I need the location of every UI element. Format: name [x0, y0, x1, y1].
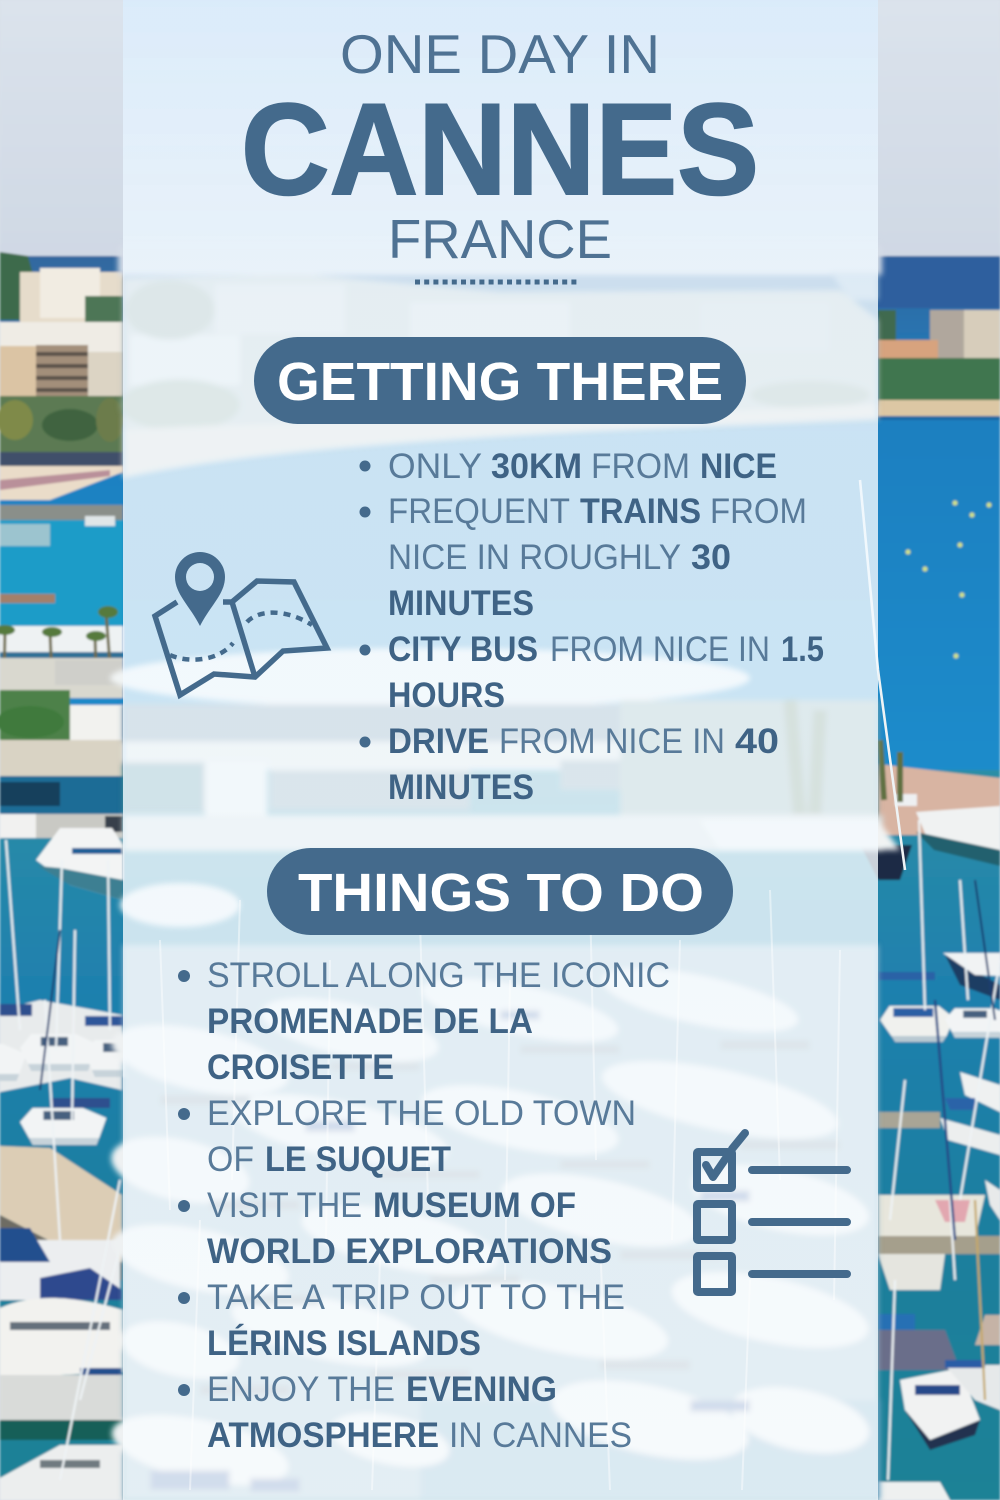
bullet: city bus: CITY BUS — [388, 630, 538, 669]
bullet: museum: WORLD EXPLORATIONS — [207, 1232, 612, 1271]
left yacht — [36, 828, 123, 900]
bullet: frequent trains: 30 — [691, 538, 731, 577]
bullet: evening: EVENING — [406, 1370, 557, 1409]
bullet: islands: TAKE A TRIP OUT TO THE — [207, 1278, 625, 1317]
list: things to do — [178, 956, 670, 1455]
right town — [878, 258, 1000, 308]
bullet: promenade: PROMENADE DE LA — [207, 1002, 533, 1041]
bullet: only 30km: NICE — [700, 447, 777, 486]
bullet: drive — [360, 722, 779, 807]
bullet: evening: ENJOY THE — [207, 1370, 395, 1409]
bullet: frequent trains: MINUTES — [388, 584, 534, 623]
bullet: promenade: STROLL ALONG THE ICONIC — [207, 956, 670, 995]
title line: Cannes: CANNES — [241, 76, 759, 222]
bullet: frequent trains: NICE IN ROUGHLY — [388, 538, 681, 577]
bullet: city bus: FROM NICE IN — [550, 630, 770, 669]
large boats lower left — [0, 1240, 120, 1300]
bullet: museum: VISIT THE — [207, 1186, 362, 1225]
boats right — [945, 955, 1000, 1000]
bullet: evening — [178, 1370, 632, 1455]
right promenade and yachts — [878, 764, 1000, 835]
boats left — [0, 1000, 122, 1092]
bullet: only 30km — [360, 447, 777, 486]
left dock — [0, 1146, 122, 1262]
title: ONE DAY IN CANNES FRANCE — [241, 23, 759, 270]
bullet: only 30km: 30KM — [491, 447, 582, 486]
bullet: old town: EXPLORE THE OLD TOWN — [207, 1094, 636, 1133]
harbour base, lightened — [123, 945, 878, 1500]
bullet: only 30km: FROM — [591, 447, 690, 486]
bullet: museum: MUSEUM OF — [373, 1186, 576, 1225]
bullet: frequent trains: FREQUENT — [388, 492, 570, 531]
bullet: promenade: CROISETTE — [207, 1048, 394, 1087]
sky behind the town — [118, 245, 882, 275]
bullet: drive: FROM NICE IN — [499, 722, 725, 761]
left town — [0, 252, 40, 320]
heading pill: getting there — [254, 337, 746, 424]
bullet: promenade — [178, 956, 670, 1087]
town — [123, 274, 878, 450]
bullet: only 30km: ONLY — [388, 447, 482, 486]
bullet: evening: ATMOSPHERE — [207, 1416, 439, 1455]
bullet: drive: 40 — [735, 722, 779, 761]
bullet: drive: MINUTES — [388, 768, 534, 807]
masts — [6, 820, 1000, 1480]
bullet: drive: DRIVE — [388, 722, 489, 761]
icon: checklist — [697, 1133, 847, 1292]
photo behind the panel, softened — [105, 245, 900, 1500]
title line: one day in: ONE DAY IN — [340, 23, 660, 85]
bullet: frequent trains: TRAINS — [580, 492, 701, 531]
bullet: city bus — [360, 630, 824, 715]
faint masts on the panel — [160, 890, 840, 1490]
bullet: old town — [178, 1094, 636, 1179]
icon: map with location pin — [155, 552, 327, 695]
bullet: old town: OF — [207, 1140, 254, 1179]
conference dome — [110, 648, 750, 708]
heading pill: things to do: THINGS TO DO — [298, 863, 704, 923]
list: getting there — [360, 447, 824, 807]
heading pill: things to do — [267, 848, 733, 935]
moored boats — [105, 883, 875, 1498]
bullet: frequent trains: FROM — [710, 492, 807, 531]
translucent centre panel — [123, 0, 878, 1500]
heading pill: getting there: GETTING THERE — [277, 352, 723, 412]
title line: France: FRANCE — [388, 208, 612, 270]
bullet: museum — [178, 1186, 612, 1271]
bullet: city bus: 1.5 — [781, 630, 824, 669]
bullet: evening: IN CANNES — [449, 1416, 632, 1455]
bullet: frequent trains — [360, 492, 807, 623]
bullet: city bus: HOURS — [388, 676, 505, 715]
bullet: islands: LÉRINS ISLANDS — [207, 1323, 481, 1363]
bullet: islands — [178, 1278, 625, 1363]
bullet: old town: LE SUQUET — [265, 1140, 451, 1179]
sea buoys — [906, 500, 992, 658]
